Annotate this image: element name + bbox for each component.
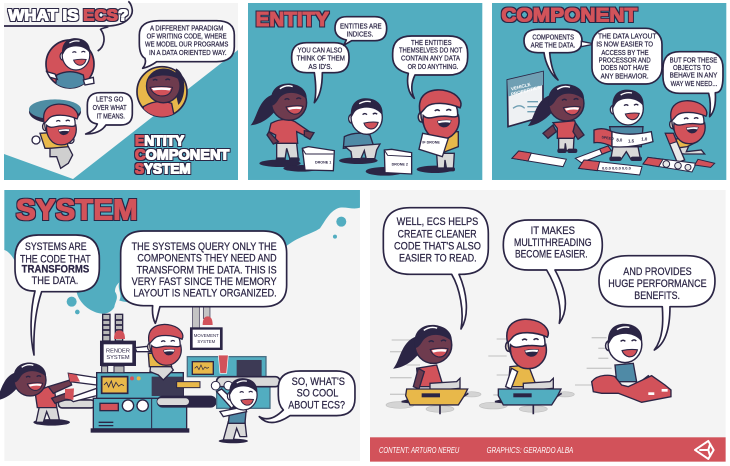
panel: component: 0.0.0 0.0.0 0.0.0 xyxy=(602,165,632,170)
speech bubble: but for these objects: BUT FOR THESE xyxy=(670,55,717,64)
oscilloscope xyxy=(102,377,128,393)
title: system: SYSTEM xyxy=(16,195,138,227)
speech bubble: let's go over what it means: IT MEANS. xyxy=(97,111,125,120)
speech bubble: a different paradigm xyxy=(139,21,234,68)
character: bearded man lifting strip xyxy=(665,101,707,163)
character: boy holding data strip: 1.0 xyxy=(641,137,648,142)
character: boy crouching xyxy=(339,98,383,164)
speech bubble: let's go over what it means: OVER WHAT xyxy=(93,103,127,112)
character: woman with arms open xyxy=(528,84,584,153)
icon: unity logo xyxy=(695,441,714,459)
speech bubble: the systems query only: TRANSFORM THE DATA. THIS IS xyxy=(137,264,277,276)
cloud droplets xyxy=(67,217,346,314)
speech bubble: let's go over what it means: LET'S GO xyxy=(96,95,123,104)
panel: what is ECS xyxy=(4,1,238,180)
speech bubble: ECS helps create cleaner code: CREATE CLEANER xyxy=(398,228,477,240)
poster: vehicle properties: VEHICLE xyxy=(510,82,531,92)
speech bubble: the data layout: ANY BEHAVIOR. xyxy=(601,71,649,80)
floor strips xyxy=(512,146,715,175)
speech bubble: so what's so cool about ECS: SO, WHAT'S xyxy=(292,376,345,388)
speech bubble: ECS helps create cleaner code: EASIER TO READ. xyxy=(399,252,477,264)
footer credit: content: CONTENT: ARTURO NEREU xyxy=(379,445,460,455)
speech bubble: multithreading easier: MULTITHREADING xyxy=(514,237,592,249)
character: woman on yellow drone xyxy=(386,325,481,414)
speech bubble: systems are the code: THE CODE THAT xyxy=(20,253,91,265)
speech bubble: systems are the code: THE DATA. xyxy=(32,275,78,287)
acronym: entity component system: SYSTEM xyxy=(135,161,191,177)
speech bubble: the entities do not contain data: OR DO ANYTHING. xyxy=(408,62,458,71)
speech bubble: ECS helps create cleaner code: CODE THAT'S ALSO xyxy=(394,240,481,252)
title: component: COMPONENT xyxy=(501,6,638,27)
speech bubble: so what's so cool about ECS: ABOUT ECS? xyxy=(288,399,345,411)
panel: benefits xyxy=(370,190,726,462)
box: drone 1 xyxy=(283,147,334,172)
character: bearded man on teal drone xyxy=(479,319,574,414)
speech bubble: the entities do not contain data xyxy=(393,36,468,98)
speech bubble: the data layout: ACCESS BY THE xyxy=(601,48,649,57)
character: boy running with excited face xyxy=(217,378,257,443)
speech bubble: but for these objects: WAY WE NEED... xyxy=(671,79,717,88)
speech bubble: the data layout: IS NOW EASIER TO xyxy=(596,40,653,49)
speech bubble: let's go over what it means xyxy=(86,93,132,134)
movement system machine: SYSTEM xyxy=(197,339,216,344)
speech bubble: the data layout: PROCESSOR AND xyxy=(599,55,651,64)
speech bubble: the systems query only: THE SYSTEMS QUERY ONLY THE xyxy=(132,241,277,253)
character: woman in yellow circle xyxy=(137,67,187,120)
character: boy holding data strip xyxy=(594,90,653,161)
smokestacks xyxy=(103,314,123,341)
character: woman pulling strips into machine xyxy=(0,363,97,426)
character: boy in red circle xyxy=(46,38,94,93)
acronym: entity component system xyxy=(135,134,229,177)
monitor: render system: RENDER xyxy=(106,348,130,354)
speech bubble: huge performance benefits xyxy=(599,256,715,350)
acronym: entity component system: COMPONENT xyxy=(135,147,229,163)
speech bubble: you can also think of them as IDs: AS ID'S. xyxy=(308,62,332,71)
panel: component xyxy=(492,3,726,180)
box: drone 2: DRONE 2 xyxy=(392,162,408,166)
speech bubble: systems are the code: TRANSFORMS xyxy=(22,263,89,275)
character: boy in red car xyxy=(592,324,671,402)
conveyor left xyxy=(58,400,95,408)
speech bubble: ECS helps create cleaner code: WELL, ECS HELPS xyxy=(397,216,478,228)
movement system machine xyxy=(187,307,280,408)
speech bubble: components are the data: ARE THE DATA. xyxy=(531,41,575,50)
monitor: render system: SYSTEM xyxy=(106,355,130,361)
speech bubble: huge performance benefits: BENEFITS. xyxy=(634,290,680,302)
character: woman pointing xyxy=(250,83,314,167)
footer credit: graphics: GRAPHICS: GERARDO ALBA xyxy=(487,445,574,455)
speech bubble: multithreading easier: BECOME EASIER. xyxy=(515,249,588,261)
conveyor belt xyxy=(157,396,217,408)
character: bearded man with box xyxy=(417,90,461,173)
speech bubble: a different paradigm: A DIFFERENT PARADIGM xyxy=(150,24,223,33)
poster: vehicle properties: PROPERTIES xyxy=(510,85,541,97)
smoke wisp xyxy=(114,282,121,313)
teal cloud xyxy=(4,190,360,314)
poster: vehicle properties xyxy=(507,72,543,127)
speech bubble: the data layout: THE DATA LAYOUT xyxy=(598,31,657,40)
teal diagonal background xyxy=(4,50,238,180)
character: bearded man on machine pressing button xyxy=(135,324,183,380)
title: what is ECS: WHAT IS ECS? xyxy=(8,8,128,25)
speech bubble: you can also think of them as IDs: YOU CAN ALSO xyxy=(298,46,342,55)
speech bubble: you can also think of them as IDs xyxy=(292,43,349,103)
character: bearded man falling with disc xyxy=(29,99,81,168)
speech bubble: huge performance benefits: HUGE PERFORMANCE xyxy=(608,278,707,290)
speech bubble: the systems query only: COMPONENTS THEY NEED AND xyxy=(137,253,277,265)
speech bubble: entities are indices: ENTITIES ARE xyxy=(340,21,382,30)
title bubble xyxy=(4,1,132,51)
speech bubble: the systems query only: VERY FAST SINCE THE MEMORY xyxy=(132,276,277,288)
footer bar xyxy=(370,437,726,462)
character: boy holding data strip: 8.0 xyxy=(616,138,623,143)
box: drone 2 xyxy=(366,149,412,176)
speech bubble: components are the data: COMPONENTS xyxy=(532,32,574,41)
alarm light xyxy=(114,330,125,339)
monitor: render system xyxy=(100,341,136,366)
speech bubble: the data layout: DOES NOT HAVE xyxy=(601,63,649,72)
speed lines xyxy=(390,338,612,395)
character: boy holding data strip: SPEED xyxy=(601,135,614,141)
panel: entity xyxy=(248,3,482,180)
speech bubble: you can also think of them as IDs: THINK OF THEM xyxy=(297,54,345,63)
speech bubble: so what's so cool about ECS: SO COOL xyxy=(297,388,338,400)
box: drone 1: DRONE 1 xyxy=(315,160,331,164)
speech bubble: ECS helps create cleaner code xyxy=(383,208,488,329)
speech bubble: the entities do not contain data: THEMSELVES DO NOT xyxy=(399,46,463,55)
speech bubble: so what's so cool about ECS xyxy=(259,371,355,423)
speech bubble: the systems query only: LAYOUT IS NEATLY ORGANIZED. xyxy=(133,288,277,300)
speech bubble: the entities do not contain data: THE ENTITIES xyxy=(411,38,452,47)
speech bubble: components are the data xyxy=(524,29,582,80)
movement system machine: MOVEMENT xyxy=(194,333,219,338)
render system machine xyxy=(58,314,217,433)
speech bubble: but for these objects: OBJECTS TO xyxy=(673,63,711,72)
speech bubble: the data layout xyxy=(581,28,662,84)
speech bubble: entities are indices xyxy=(335,17,387,45)
speech bubble: multithreading easier: IT MAKES xyxy=(531,225,575,237)
speech bubble: but for these objects: BEHAVE IN ANY xyxy=(670,71,717,80)
title: entity: ENTITY xyxy=(256,8,329,31)
speech bubble: a different paradigm: OF WRITING CODE, WHERE xyxy=(147,32,227,41)
speech bubble: huge performance benefits: AND PROVIDES xyxy=(623,266,692,278)
speech bubble: a different paradigm: IN A DATA ORIENTED WAY. xyxy=(149,48,227,57)
character: bearded man with box: IF DRONE xyxy=(422,141,440,145)
acronym: entity component system: ENTITY xyxy=(135,134,185,150)
character: boy holding data strip: 1.5 xyxy=(628,139,635,144)
speech bubble: a different paradigm: WE MODEL OUR PROGRAMS xyxy=(145,40,228,49)
speech bubble: entities are indices: INDICES. xyxy=(347,30,373,39)
speech bubble: systems are the code xyxy=(15,235,99,355)
speech bubble: the entities do not contain data: CONTAIN ANY DATA xyxy=(401,54,461,63)
panel: system xyxy=(0,190,360,461)
speech bubble: the systems query only xyxy=(121,231,287,323)
speech bubble: multithreading easier xyxy=(503,220,602,323)
speech bubble: systems are the code: SYSTEMS ARE xyxy=(25,241,87,253)
machine body xyxy=(97,373,183,399)
speech bubble: but for these objects xyxy=(663,52,723,117)
